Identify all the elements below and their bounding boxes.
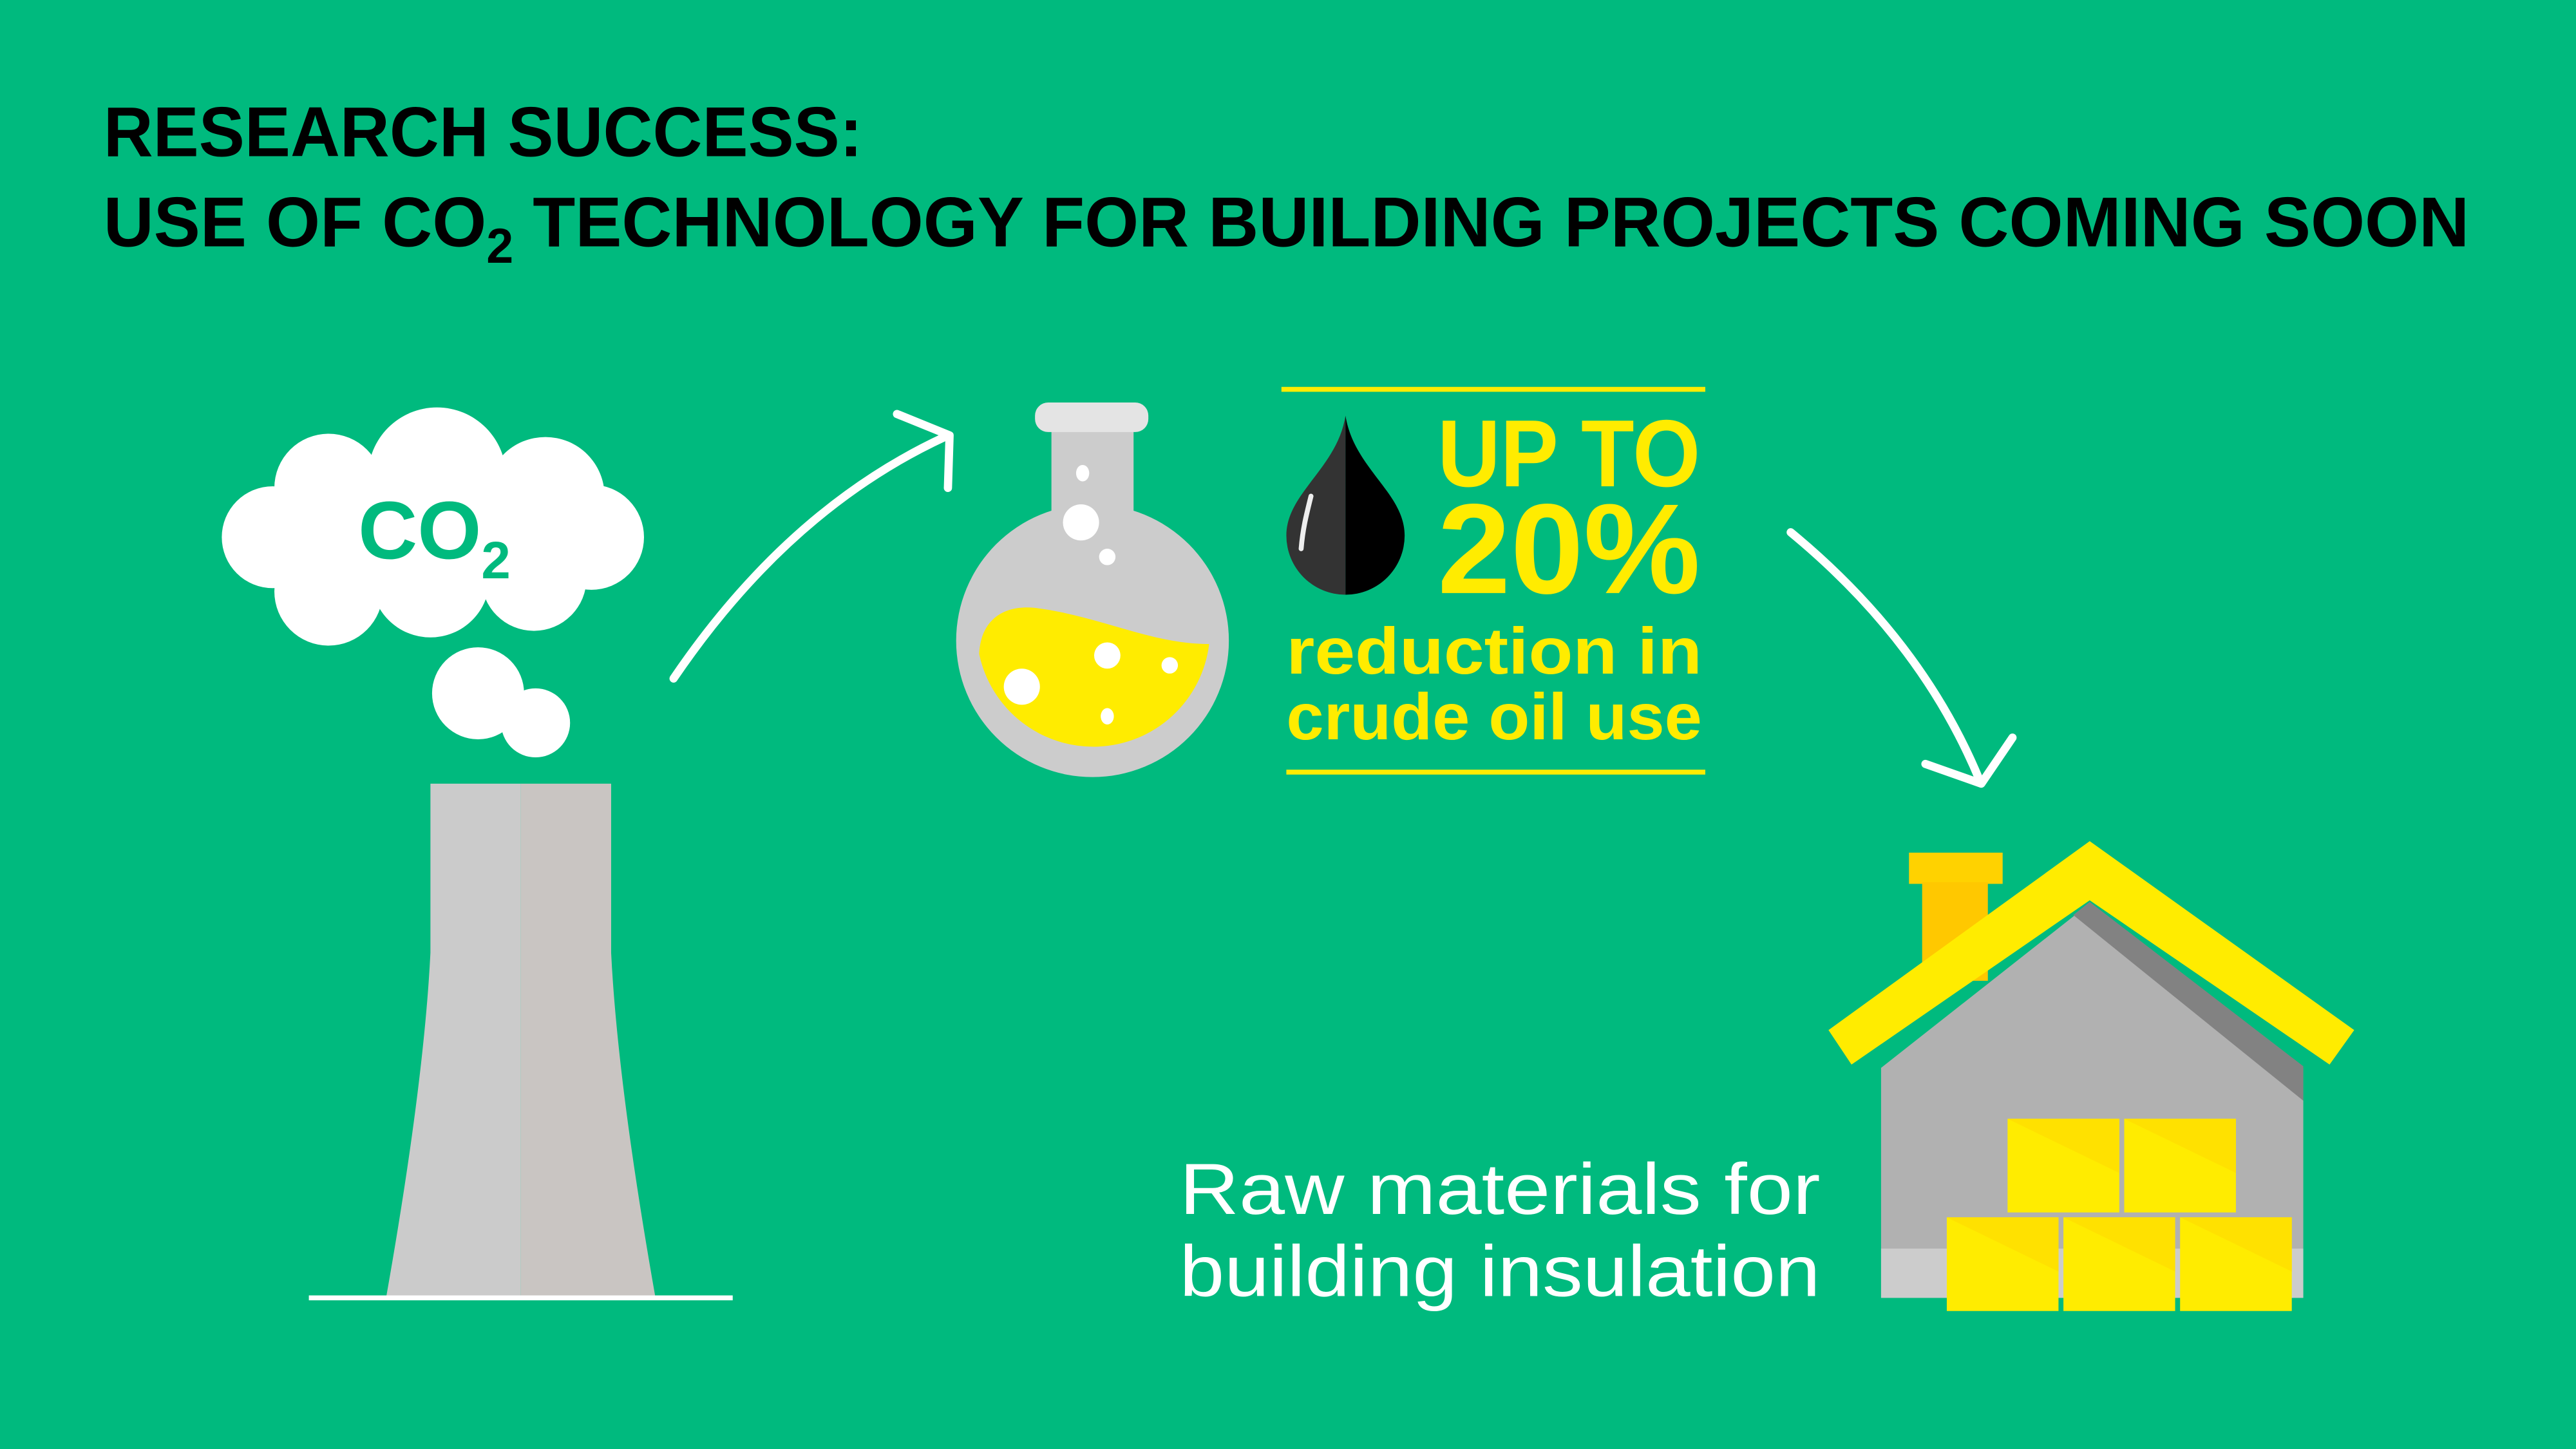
icon: CO2 cloud [222,408,644,757]
callout: crude oil reduction [1282,390,1705,772]
title [104,93,2469,274]
callout: crude oil reduction: 20% [1437,478,1700,621]
arrow: to flask [674,414,949,679]
icon: oil drop [1286,415,1405,594]
text: raw materials [1180,1148,1821,1312]
icon: house with insulation [1828,841,2354,1311]
icon: chimney [309,784,733,1298]
icon: CO2 cloud: CO [358,485,481,576]
callout: crude oil reduction: reduction in [1286,614,1702,688]
icon: CO2 cloud: 2 [481,531,511,590]
text: raw materials: building insulation [1180,1231,1821,1312]
title: RESEARCH SUCCESS: [104,93,862,171]
title: 2 [486,219,513,274]
title: USE OF CO [104,184,492,262]
text: raw materials: Raw materials for [1180,1148,1821,1229]
callout: crude oil reduction: UP TO [1437,401,1700,507]
title: TECHNOLOGY FOR BUILDING PROJECTS COMING SOON [513,184,2469,262]
arrow: to house [1791,533,2012,784]
icon: flask [956,402,1229,777]
callout: crude oil reduction: crude oil use [1286,680,1702,753]
